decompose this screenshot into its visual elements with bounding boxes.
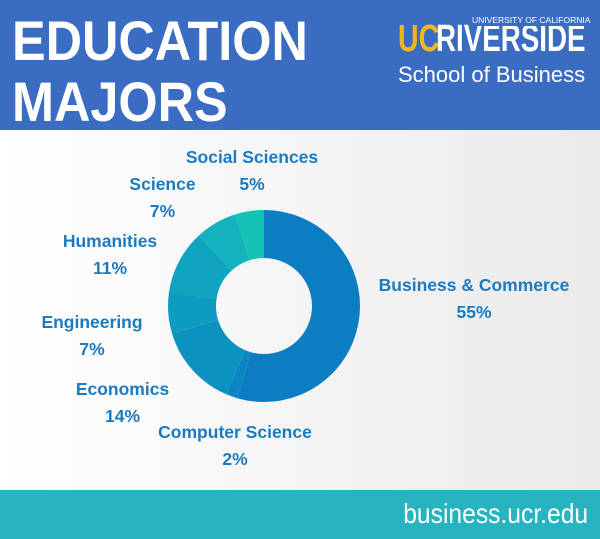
label: social sciences: 5% [239, 174, 265, 194]
logo: UC Riverside School of Business: UNIVERSITY OF CALIFORNIA [472, 15, 590, 25]
title [12, 9, 308, 133]
header band [0, 0, 600, 130]
label: social sciences: Social Sciences [186, 147, 318, 167]
label: science [129, 174, 196, 221]
label: economics [76, 379, 169, 426]
label: computer science: 2% [222, 449, 248, 469]
label: business & commerce: 55% [456, 302, 492, 322]
footer band [0, 490, 600, 539]
label: humanities [63, 231, 157, 278]
title: EDUCATION [12, 9, 308, 72]
label: engineering: Engineering [41, 312, 143, 332]
label: science: 7% [150, 201, 175, 221]
label: business & commerce [379, 275, 569, 322]
label: social sciences [186, 147, 318, 194]
logo: UC Riverside School of Business: RIVERSIDE [436, 18, 586, 60]
label: science: Science [129, 174, 196, 194]
logo: UC Riverside School of Business: UC [398, 18, 439, 60]
label: computer science [158, 422, 312, 469]
logo: UC Riverside School of Business [398, 15, 590, 87]
label: computer science: Computer Science [158, 422, 312, 442]
label: economics: Economics [76, 379, 169, 399]
label: business & commerce: Business & Commerce [379, 275, 569, 295]
label: engineering [41, 312, 143, 359]
title: MAJORS [12, 70, 228, 133]
url: business.ucr.edu [403, 498, 588, 529]
label: engineering: 7% [79, 339, 105, 359]
label: humanities: 11% [93, 258, 127, 278]
label: humanities: Humanities [63, 231, 157, 251]
label: economics: 14% [105, 406, 140, 426]
logo: UC Riverside School of Business: School of Business [398, 62, 585, 87]
